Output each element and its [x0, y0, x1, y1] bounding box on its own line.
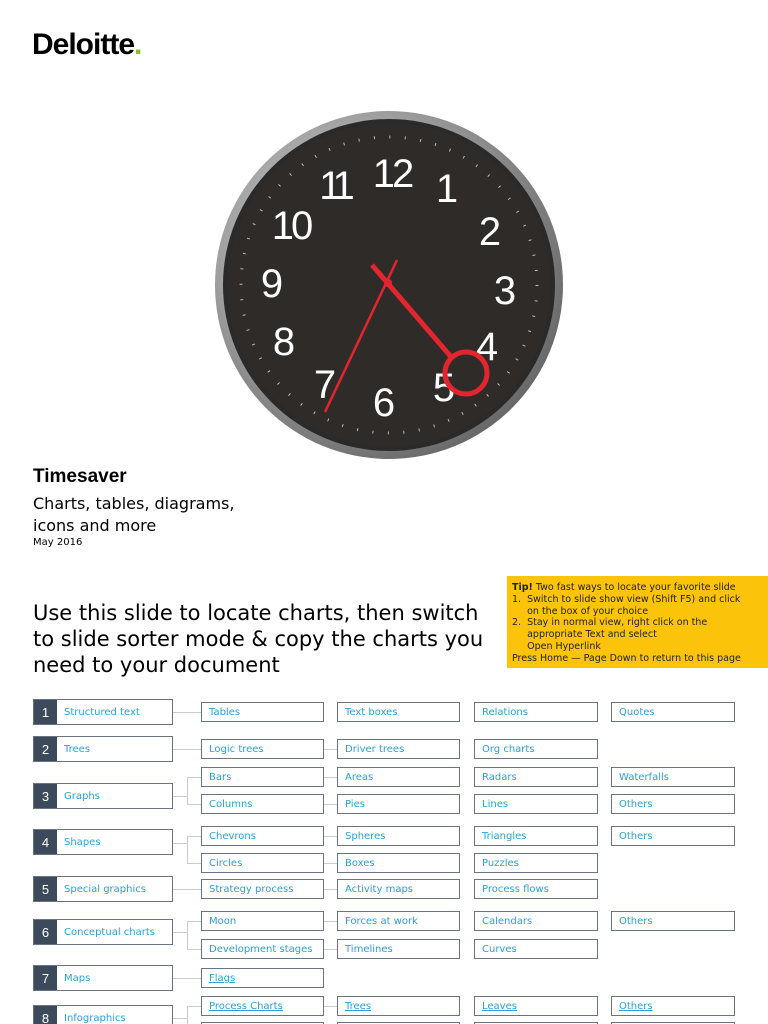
instruction text	[33, 601, 483, 677]
row 2	[33, 736, 173, 762]
clock illustration: 5	[433, 366, 455, 410]
clock illustration: 11	[319, 164, 354, 208]
row 6: 6	[42, 924, 49, 940]
navigation table: Text boxes	[345, 707, 398, 718]
row 7: Maps	[64, 972, 90, 984]
row 5: Special graphics	[64, 884, 146, 894]
tip box: Press Home — Page Down to return to this page	[512, 653, 741, 664]
navigation table: Areas	[345, 772, 373, 783]
navigation table: Pies	[345, 799, 365, 810]
row 2: Trees	[64, 744, 90, 754]
clock illustration: 6	[373, 381, 395, 425]
row 5: 5	[42, 882, 49, 896]
navigation table: Quotes	[619, 707, 655, 718]
row 4	[33, 829, 173, 855]
navigation table: Others	[619, 1001, 653, 1012]
row 1: 1	[42, 704, 49, 720]
clock illustration: 1	[436, 167, 458, 211]
row 7	[33, 965, 173, 991]
navigation table: Leaves	[482, 1001, 517, 1012]
row 4: 4	[42, 834, 49, 850]
clock illustration: 8	[273, 320, 295, 364]
title block: icons and more	[33, 516, 156, 535]
row 8	[33, 1005, 173, 1024]
clock illustration: 2	[479, 210, 501, 254]
navigation table: Timelines	[345, 944, 393, 955]
row 5	[33, 876, 173, 902]
title block: Timesaver	[33, 466, 127, 487]
navigation table: Forces at work	[345, 916, 418, 927]
connectors	[173, 712, 201, 713]
row 7: 7	[42, 970, 49, 986]
title block: Charts, tables, diagrams,	[33, 494, 234, 513]
navigation table: Boxes	[345, 858, 375, 869]
navigation table: Flags	[209, 973, 235, 984]
row 6	[33, 919, 173, 945]
clock illustration: 3	[494, 269, 516, 313]
row 6: Conceptual charts	[64, 926, 155, 938]
title block: May 2016	[33, 537, 82, 548]
navigation table: Radars	[482, 772, 517, 783]
navigation table: Activity maps	[345, 884, 413, 895]
navigation table: Waterfalls	[619, 772, 669, 783]
row 8: Infographics	[64, 1012, 126, 1024]
navigation table: Others	[619, 831, 653, 842]
navigation table: Others	[619, 799, 653, 810]
navigation table: Others	[619, 916, 653, 927]
clock illustration	[215, 111, 563, 459]
row 2: 2	[42, 742, 49, 756]
navigation table: Lines	[482, 799, 508, 810]
clock illustration: 4	[476, 325, 498, 369]
instruction text: Use this slide to locate charts, then switch	[33, 601, 478, 625]
clock illustration: 7	[314, 363, 336, 407]
navigation table: Columns	[209, 799, 253, 810]
row 4: Shapes	[64, 836, 101, 848]
navigation table: Relations	[482, 707, 528, 718]
navigation table: Triangles	[482, 831, 526, 842]
clock illustration: 12	[373, 152, 413, 196]
instruction text: need to your document	[33, 653, 280, 677]
tip box: 2. Stay in normal view, right click on the	[512, 617, 707, 628]
tip box: Open Hyperlink	[527, 641, 601, 652]
navigation table: Driver trees	[345, 744, 404, 755]
clock illustration: 9	[261, 262, 283, 306]
tip box: 1. Switch to slide show view (Shift F5) and click	[512, 594, 740, 605]
title block	[33, 466, 234, 548]
navigation table: Logic trees	[209, 744, 264, 755]
row 1	[33, 699, 173, 725]
instruction text: to slide sorter mode & copy the charts you	[33, 627, 483, 651]
navigation table	[33, 699, 735, 1024]
navigation table: Puzzles	[482, 858, 519, 869]
logo: Deloitte.	[32, 28, 141, 61]
navigation table: Process Charts	[209, 1001, 283, 1012]
tip box: on the box of your choice	[527, 606, 648, 617]
navigation table: Tables	[209, 707, 240, 718]
navigation table: Org charts	[482, 744, 535, 755]
navigation table: Strategy process	[209, 884, 293, 895]
navigation table: Moon	[209, 916, 236, 927]
tip box: Tip! Two fast ways to locate your favorite slide	[512, 582, 736, 593]
navigation table: Trees	[345, 1001, 371, 1012]
row 3: 3	[42, 788, 49, 804]
row 1: Structured text	[64, 706, 140, 718]
clock illustration: 10	[272, 204, 312, 248]
tip box	[507, 576, 768, 668]
navigation table: Chevrons	[209, 831, 256, 842]
navigation table: Curves	[482, 944, 517, 955]
navigation table: Spheres	[345, 831, 385, 842]
row 3	[33, 783, 173, 809]
navigation table: Calendars	[482, 916, 532, 927]
row 3: Graphs	[64, 790, 100, 802]
navigation table: Circles	[209, 858, 242, 869]
navigation table: Development stages	[209, 944, 312, 955]
navigation table: Bars	[209, 772, 231, 783]
navigation table: Process flows	[482, 884, 549, 895]
tip box: appropriate Text and select	[527, 629, 657, 640]
